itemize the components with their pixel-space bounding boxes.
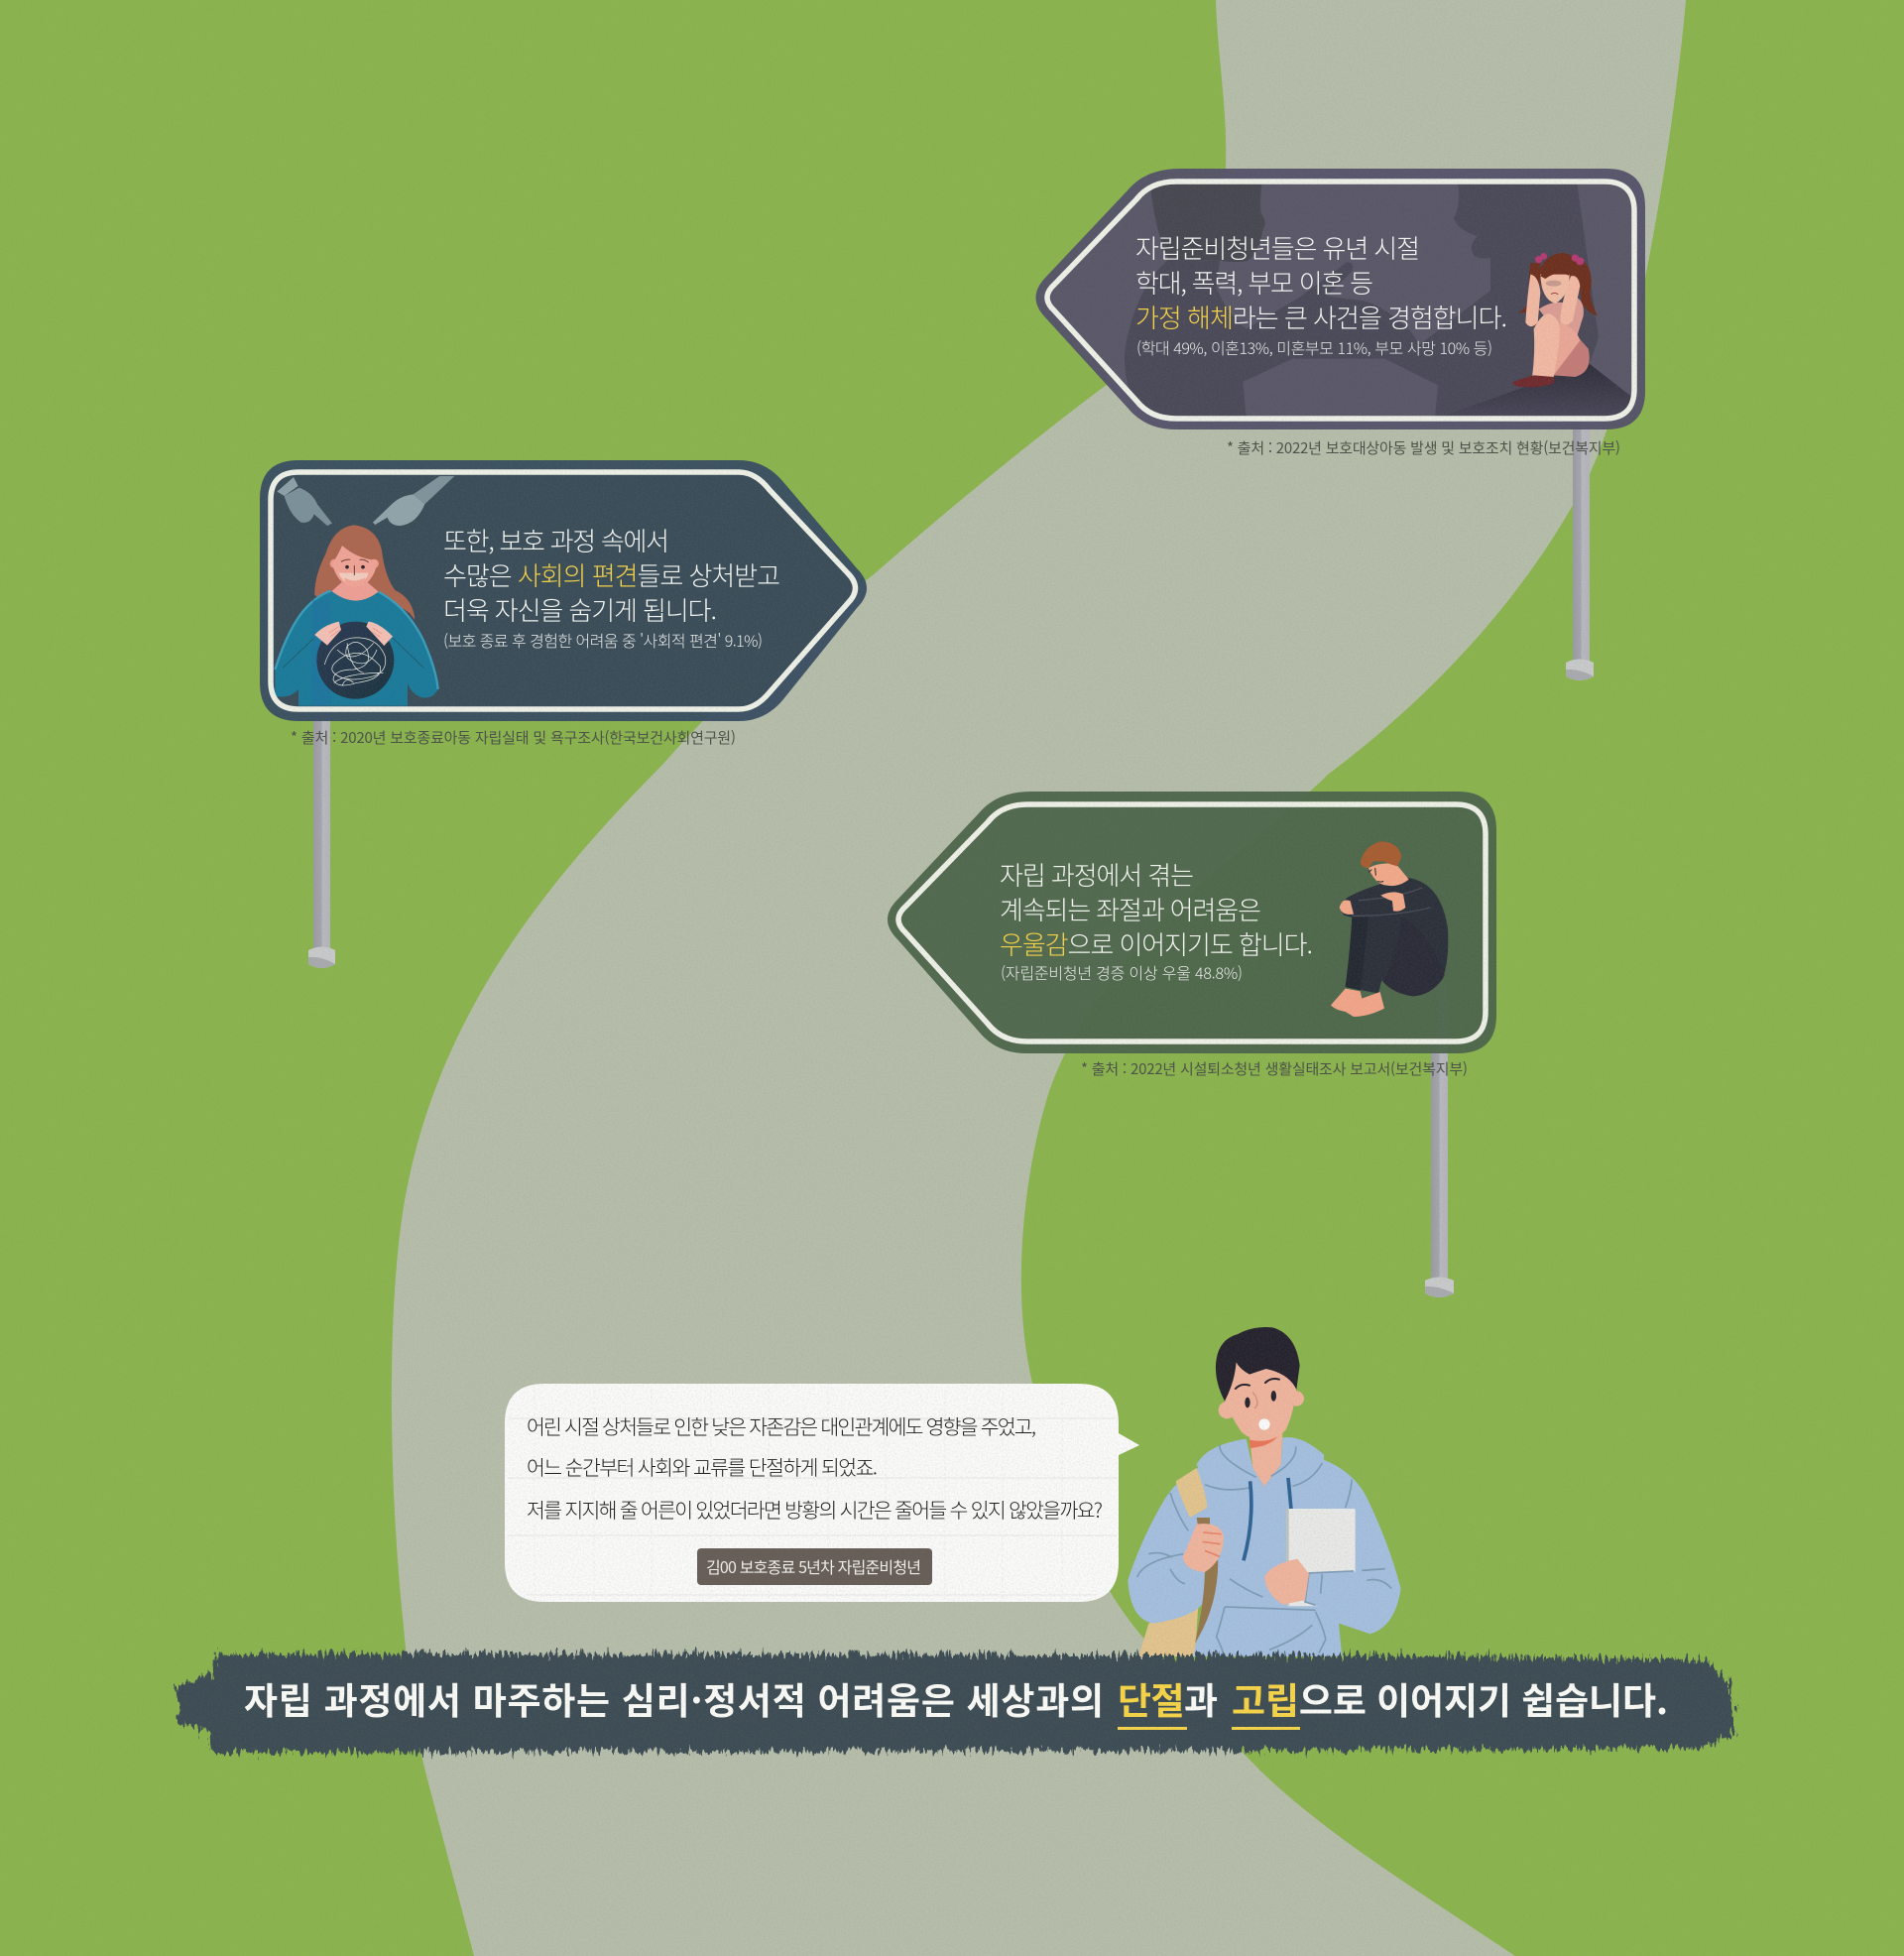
pole: sign 3 (1425, 982, 1454, 1297)
sign 3 text: (자립준비청년 경증 이상 우울 48.8%) (1001, 960, 1243, 984)
sign 3 text: 계속되는 좌절과 어려움은 (1000, 891, 1261, 927)
pole: sign 2 (308, 605, 335, 968)
banner headline: 고립으로 이어지기 쉽습니다. (1232, 1671, 1668, 1725)
panel: sign 3 depression (888, 792, 1496, 1053)
pole: sign 1 (1566, 397, 1594, 680)
banner headline (244, 1671, 1668, 1725)
illustration: girl covering her head (1512, 253, 1598, 387)
sign 3 board (888, 792, 1496, 1053)
banner headline: 단절과 (1118, 1671, 1218, 1725)
sign 2 inner field (271, 472, 855, 709)
illustration: woman holding tangled knot (275, 525, 438, 706)
sign 2 text: (보호 종료 후 경험한 어려움 중 '사회적 편견' 9.1%) (443, 628, 763, 652)
illustration: sad youth hugging knees (1331, 841, 1448, 1017)
bubble body (505, 1384, 1139, 1602)
sign 1 shadow silhouettes (1125, 184, 1630, 417)
banner headline: 자립 과정에서 마주하는 심리·정서적 어려움은 세상과의 (244, 1671, 1104, 1725)
illustration: student with bag and book (1128, 1327, 1401, 1656)
illustration: pointing hands (277, 476, 454, 526)
sign 1 board (1035, 169, 1645, 429)
sign 2 text (443, 522, 780, 652)
sign 2 text: 또한, 보호 과정 속에서 (443, 522, 669, 558)
quote text: 저를 지지해 줄 어른이 있었더라면 방황의 시간은 줄어들 수 있지 않았을까요? (527, 1494, 1103, 1524)
source note 1: * 출처 : 2022년 보호대상아동 발생 및 보호조치 현황(보건복지부) (1227, 437, 1620, 458)
panel: sign 1 family breakdown (1031, 169, 1646, 429)
brush stroke background (177, 1653, 1734, 1753)
sign 1 text: (학대 49%, 이혼13%, 미혼부모 11%, 부모 사망 10% 등) (1136, 335, 1492, 359)
speaker tag: 김00 보호종료 5년차 자립준비청년 (706, 1554, 921, 1578)
sign 3 white border (898, 804, 1486, 1041)
sign 1 text: 학대, 폭력, 부모 이혼 등 (1135, 264, 1373, 301)
sign 1 text (1135, 229, 1507, 359)
speaker tag (697, 1548, 932, 1585)
winding road (392, 0, 1686, 1956)
sign 2 board (260, 460, 867, 721)
quote text: 어린 시절 상처들로 인한 낮은 자존감은 대인관계에도 영향을 주었고, (527, 1410, 1036, 1440)
quote text (527, 1410, 1103, 1524)
underline: 고립 (1232, 1727, 1300, 1730)
source note 3: * 출처 : 2022년 시설퇴소청년 생활실태조사 보고서(보건복지부) (1081, 1058, 1468, 1079)
bottom banner (177, 1653, 1734, 1753)
panel: sign 2 social prejudice (260, 460, 867, 721)
sign 1 text: 가정 해체라는 큰 사건을 경험합니다. (1135, 299, 1507, 335)
sign 1 white border (1047, 182, 1634, 419)
sign 2 text: 수많은 사회의 편견들로 상처받고 (443, 556, 780, 593)
source note 2: * 출처 : 2020년 보호종료아동 자립실태 및 욕구조사(한국보건사회연구원) (291, 727, 736, 748)
quote text: 어느 순간부터 사회와 교류를 단절하게 되었죠. (527, 1451, 878, 1481)
speech bubble: youth quote (505, 1384, 1139, 1602)
sign 3 text (1000, 856, 1313, 984)
sign 2 text: 더욱 자신을 숨기게 됩니다. (443, 591, 717, 628)
sign 1 text: 자립준비청년들은 유년 시절 (1135, 229, 1420, 266)
sign 3 text: 자립 과정에서 겪는 (1000, 856, 1194, 893)
sign 2 white border (271, 472, 855, 709)
sign 3 text: 우울감으로 이어지기도 합니다. (1000, 925, 1313, 962)
underline: 단절 (1118, 1727, 1187, 1730)
